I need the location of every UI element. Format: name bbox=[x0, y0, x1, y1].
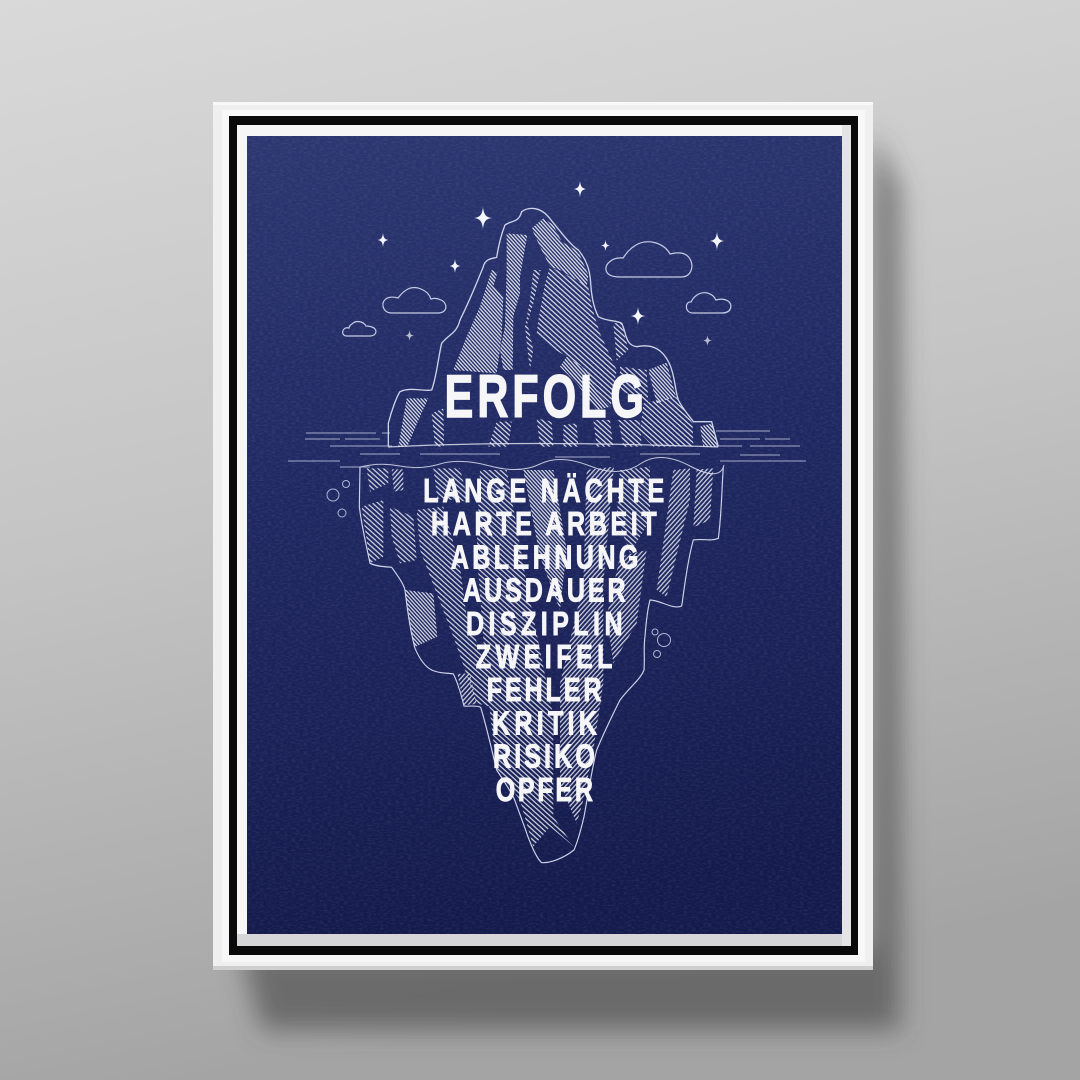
canvas poster bbox=[247, 136, 842, 934]
white outer frame bbox=[213, 102, 873, 970]
LANGE NÄCHTE: LANGE NÄCHTE bbox=[423, 473, 664, 510]
frame drop shadow bbox=[240, 130, 900, 1030]
iceberg top hatching bbox=[398, 218, 718, 447]
water surface lines bbox=[288, 431, 806, 474]
FEHLER: FEHLER bbox=[487, 672, 601, 709]
iceberg bottom hatching bbox=[362, 467, 713, 847]
OPFER: OPFER bbox=[496, 772, 593, 809]
iceberg bottom outline bbox=[359, 467, 723, 863]
AUSDAUER: AUSDAUER bbox=[463, 572, 626, 609]
canvas edge bbox=[237, 125, 851, 946]
ABLEHNUNG: ABLEHNUNG bbox=[451, 539, 638, 576]
RISIKO: RISIKO bbox=[493, 738, 595, 775]
HARTE ARBEIT: HARTE ARBEIT bbox=[431, 506, 657, 543]
clouds bbox=[343, 242, 731, 336]
iceberg below water bbox=[359, 467, 723, 863]
cloud small right bbox=[686, 293, 731, 313]
stars bbox=[377, 181, 724, 346]
ZWEIFEL: ZWEIFEL bbox=[476, 639, 613, 676]
word list bbox=[423, 473, 664, 809]
black frame gap bbox=[229, 116, 858, 955]
bubbles left bbox=[327, 480, 350, 517]
iceberg top outline bbox=[388, 208, 718, 447]
cloud left bbox=[383, 288, 446, 313]
bubbles right bbox=[652, 629, 670, 658]
iceberg above water bbox=[388, 208, 718, 447]
title: ERFOLG: ERFOLG bbox=[444, 364, 644, 431]
cloud large right bbox=[606, 242, 692, 277]
DISZIPLIN: DISZIPLIN bbox=[466, 606, 623, 643]
cloud small left bbox=[343, 322, 376, 336]
KRITIK: KRITIK bbox=[492, 705, 597, 742]
